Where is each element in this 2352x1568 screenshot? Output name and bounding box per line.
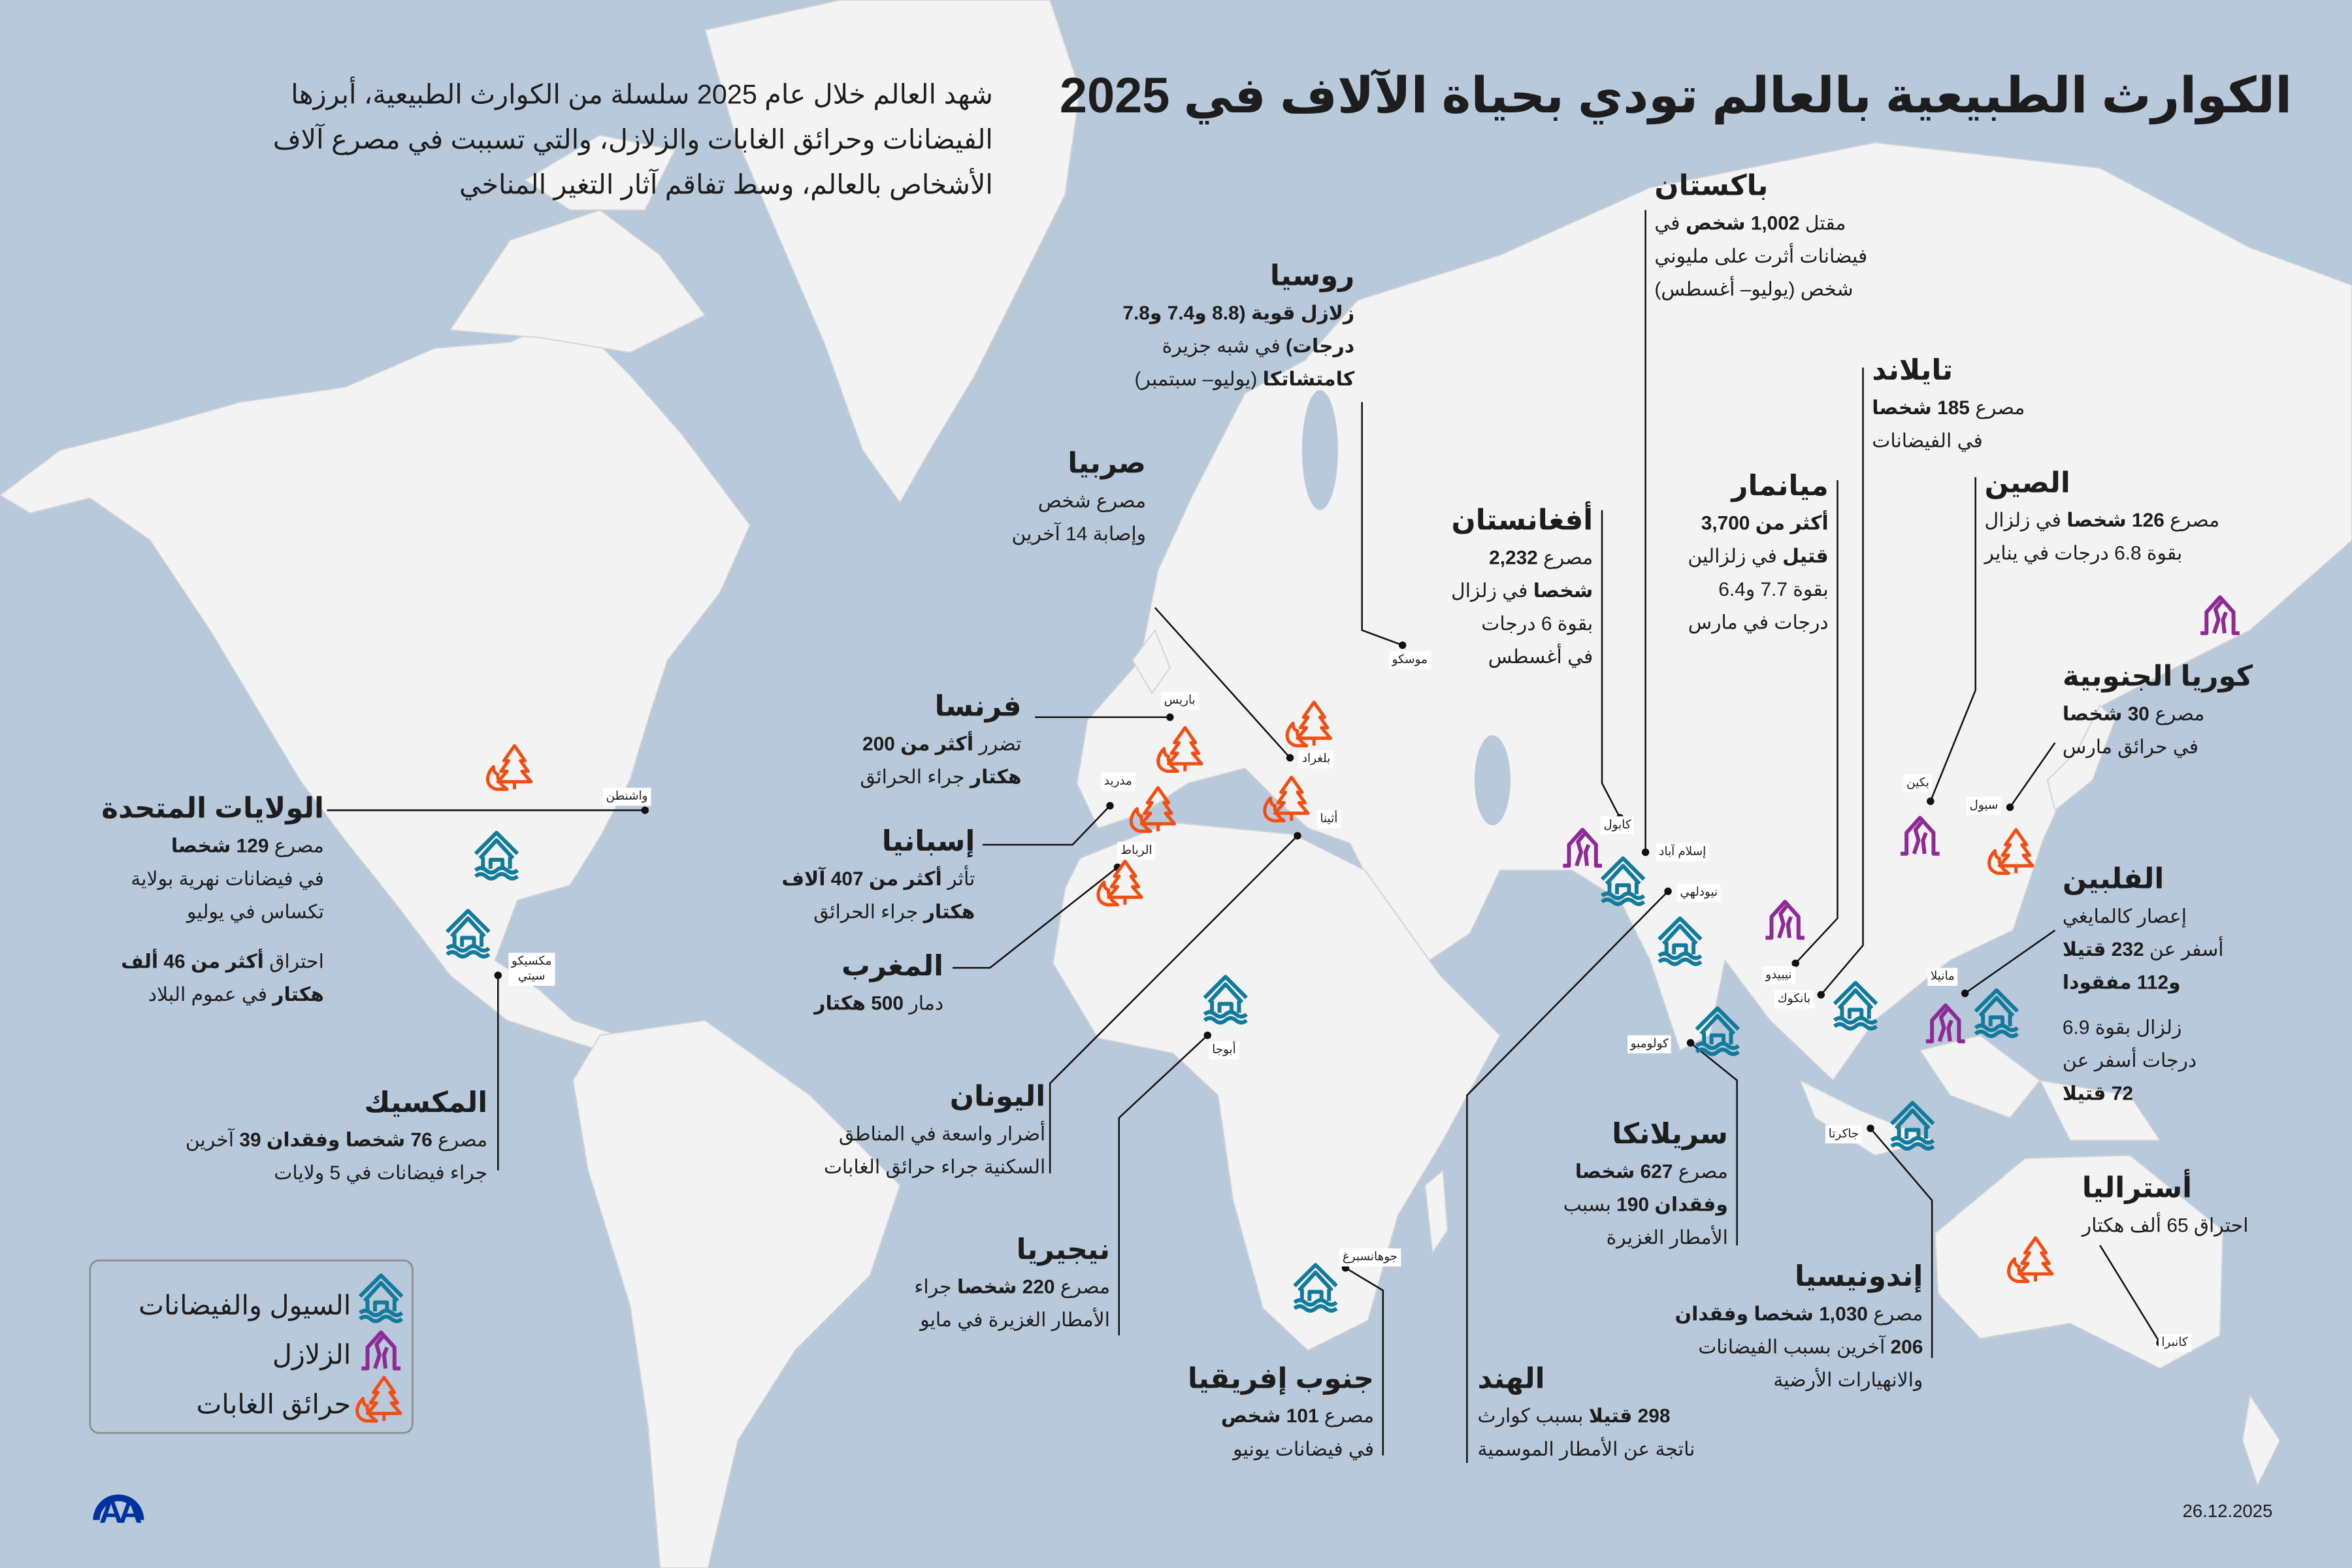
Afghanistan: في أغسطس: [1488, 645, 1593, 668]
text: كولومبو: [1631, 1037, 1669, 1051]
Sri Lanka: سريلانكا: [1612, 1119, 1728, 1151]
Sri Lanka: الأمطار الغزيرة: [1607, 1226, 1728, 1249]
Greece: السكنية جراء حرائق الغابات: [824, 1155, 1045, 1178]
Spain: هكتار جراء الحرائق: [813, 900, 975, 923]
Myanmar: أكثر من 3,700: [1701, 512, 1829, 534]
text: بلغراد: [1302, 752, 1330, 765]
Thailand: [1872, 355, 2025, 452]
Pakistan: فيضانات أثرت على مليوني: [1654, 244, 1867, 267]
Australia: احتراق 65 ألف هكتار: [2082, 1214, 2249, 1236]
China: الصين: [1985, 468, 2070, 500]
Nigeria: [914, 1235, 1110, 1331]
text: بانكوك: [1778, 992, 1810, 1005]
text: أبوجا: [1212, 1043, 1236, 1056]
intro text: شهد العالم خلال عام 2025 سلسلة من الكوارث الطبيعية، أبرزها: [291, 80, 993, 110]
Greece: [824, 1082, 1045, 1179]
Myanmar: قتيل في زلزالين: [1688, 545, 1829, 567]
Russia: زلازل قوية (8.8 و7.4 و7.8: [1122, 302, 1354, 324]
Mexico: جراء فيضانات في 5 ولايات: [274, 1162, 487, 1184]
Afghanistan: شخصا في زلزال: [1451, 580, 1593, 602]
South Africa: مصرع 101 شخص: [1221, 1405, 1374, 1427]
Philippines: أسفر عن 232 قتيلا: [2063, 938, 2224, 960]
India: الهند: [1477, 1364, 1545, 1396]
icons: earthquakes: [1563, 597, 2240, 1041]
India: [1477, 1364, 1695, 1461]
Philippines: 72 قتيلا: [2063, 1082, 2133, 1104]
Philippines: درجات أسفر عن: [2063, 1049, 2197, 1071]
Indonesia: مصرع 1,030 شخصا وفقدان: [1675, 1302, 1923, 1325]
seas: [1475, 735, 1511, 825]
legend text: [139, 1290, 351, 1420]
USA: [101, 794, 324, 1006]
Greece: اليونان: [950, 1082, 1045, 1113]
Philippines: و112 مفقودا زلزال بقوة 6.9: [2063, 971, 2181, 1038]
Serbia: وإصابة 14 آخرين: [1012, 522, 1146, 545]
text: واشنطن: [606, 789, 648, 803]
Sri Lanka: مصرع 627 شخصا: [1575, 1160, 1728, 1183]
India: 298 قتيلا بسبب كوارث: [1477, 1405, 1670, 1427]
text: مدريد: [1104, 774, 1132, 788]
text: إسلام آباد: [1659, 845, 1706, 858]
Thailand: تايلاند: [1872, 355, 1953, 387]
date: 26.12.2025: [2183, 1501, 2272, 1522]
Indonesia: إندونيسيا: [1795, 1262, 1923, 1294]
South Korea: مصرع 30 شخصا: [2063, 702, 2204, 725]
South Korea: كوريا الجنوبية: [2063, 662, 2253, 693]
Philippines: [2063, 864, 2224, 1104]
Spain: تأثر أكثر من 407 آلاف: [781, 867, 975, 890]
text: باريس: [1164, 693, 1196, 707]
India: ناتجة عن الأمطار الموسمية: [1477, 1437, 1695, 1460]
title: الكوارث الطبيعية بالعالم تودي بحياة الآلاف في 2025: [1060, 67, 2292, 123]
legend text: الزلازل: [272, 1340, 351, 1370]
Nigeria: الأمطار الغزيرة في مايو: [920, 1309, 1110, 1331]
Mexico: مصرع 76 شخصا وفقدان 39 آخرين: [186, 1128, 487, 1151]
Serbia: مصرع شخص: [1038, 489, 1146, 512]
Greece: أضرار واسعة في المناطق: [839, 1122, 1045, 1145]
Afghanistan: مصرع 2,232: [1489, 546, 1593, 568]
Australia: أستراليا: [2082, 1173, 2192, 1205]
legend box: [90, 1260, 412, 1433]
Spain: إسبانيا: [882, 826, 975, 858]
Serbia: صربيا: [1068, 449, 1146, 480]
continents: [0, 315, 750, 1051]
text: مكسيكو: [512, 955, 551, 968]
text: نيبيدو: [1765, 968, 1792, 981]
Sri Lanka: [1563, 1119, 1728, 1249]
Philippines: إعصار كالمايغي: [2063, 905, 2187, 927]
Myanmar: ميانمار: [1731, 471, 1829, 502]
South Africa: [1188, 1364, 1374, 1461]
intro text: [273, 76, 993, 201]
Afghanistan: بقوة 6 درجات: [1481, 612, 1593, 634]
Morocco: المغرب: [841, 951, 943, 983]
Pakistan: باكستان: [1654, 171, 1768, 203]
city labels: [508, 651, 2191, 1352]
Afghanistan: أفغانستان: [1452, 506, 1593, 537]
South Korea: في حرائق مارس: [2063, 735, 2198, 758]
Serbia: [1012, 449, 1146, 545]
Nigeria: مصرع 220 شخصا جراء: [914, 1275, 1110, 1298]
Russia: روسيا: [1270, 261, 1354, 293]
Pakistan: مقتل 1,002 شخص في: [1654, 212, 1846, 234]
intro text: الفيضانات وحرائق الغابات والزلازل، والتي تسببت في مصرع آلاف: [273, 125, 993, 155]
text: سيول: [1970, 798, 1998, 811]
text: بكين: [1906, 776, 1929, 789]
Philippines: الفلبين: [2063, 864, 2164, 896]
text: كابول: [1603, 818, 1631, 831]
USA: هكتار في عموم البلاد: [148, 983, 324, 1005]
Afghanistan: [1451, 501, 1593, 668]
text: نيودلهي: [1680, 885, 1718, 899]
text: سيتي: [518, 970, 546, 983]
Mexico: المكسيك: [364, 1088, 487, 1119]
Mexico: [186, 1088, 487, 1184]
China: [1984, 468, 2219, 564]
France: [860, 692, 1022, 788]
legend text: حرائق الغابات: [196, 1390, 351, 1420]
Nigeria: نيجيريا: [1017, 1235, 1110, 1266]
text: جوهانسبرغ: [1343, 1250, 1397, 1264]
legend text: السيول والفيضانات: [139, 1290, 351, 1320]
China: بقوة 6.8 درجات في يناير: [1985, 542, 2182, 564]
China: مصرع 126 شخصا في زلزال: [1985, 509, 2219, 531]
Russia: [1122, 261, 1355, 391]
USA: مصرع 129 شخصا: [171, 834, 324, 857]
South Africa: في فيضانات يونيو: [1233, 1437, 1374, 1460]
Australia: [2082, 1169, 2249, 1237]
Indonesia: والانهيارات الأرضية: [1773, 1369, 1923, 1391]
Morocco: دمار 500 هكتار: [814, 992, 943, 1015]
Thailand: في الفيضانات: [1872, 429, 1983, 451]
Spain: [781, 826, 975, 923]
text: الرباط: [1120, 843, 1152, 857]
text: أثينا: [1320, 811, 1337, 825]
Myanmar: [1688, 471, 1829, 634]
Indonesia: [1675, 1262, 1923, 1392]
Russia: درجات) في شبه جزيرة: [1162, 335, 1354, 357]
Sri Lanka: وفقدان 190 بسبب: [1563, 1193, 1728, 1215]
USA: الولايات المتحدة: [101, 794, 324, 825]
text: مانيلا: [1931, 970, 1955, 983]
AA logo: AA: [99, 1493, 142, 1530]
text: جاكرتا: [1829, 1127, 1859, 1140]
Myanmar: درجات في مارس: [1688, 611, 1829, 633]
France: فرنسا: [935, 692, 1022, 723]
Indonesia: 206 آخرين بسبب الفيضانات: [1698, 1335, 1923, 1358]
text: كانبرا: [2161, 1335, 2188, 1349]
Morocco: [813, 951, 943, 1015]
icons: fires: [487, 702, 2052, 1281]
icons: floods: [447, 833, 2017, 1311]
leader lines: [327, 210, 2160, 1463]
Thailand: مصرع 185 شخصا: [1872, 396, 2025, 419]
South Korea: [2063, 662, 2253, 758]
Pakistan: [1654, 171, 1867, 301]
intro text: الأشخاص بالعالم، وسط تفاقم آثار التغير المناخي: [459, 170, 993, 199]
Pakistan: شخص (يوليو– أغسطس): [1654, 278, 1854, 300]
France: هكتار جراء الحرائق: [860, 765, 1022, 788]
Myanmar: بقوة 7.7 و6.4: [1718, 578, 1829, 600]
text: موسكو: [1392, 653, 1428, 666]
USA: تكساس في يوليو احتراق أكثر من 46 ألف: [121, 900, 324, 972]
Russia: كامتشاتكا (يوليو– سبتمبر): [1135, 368, 1354, 390]
France: تضرر أكثر من 200: [862, 732, 1022, 755]
USA: في فيضانات نهرية بولاية: [131, 867, 324, 890]
South Africa: جنوب إفريقيا: [1188, 1364, 1374, 1396]
